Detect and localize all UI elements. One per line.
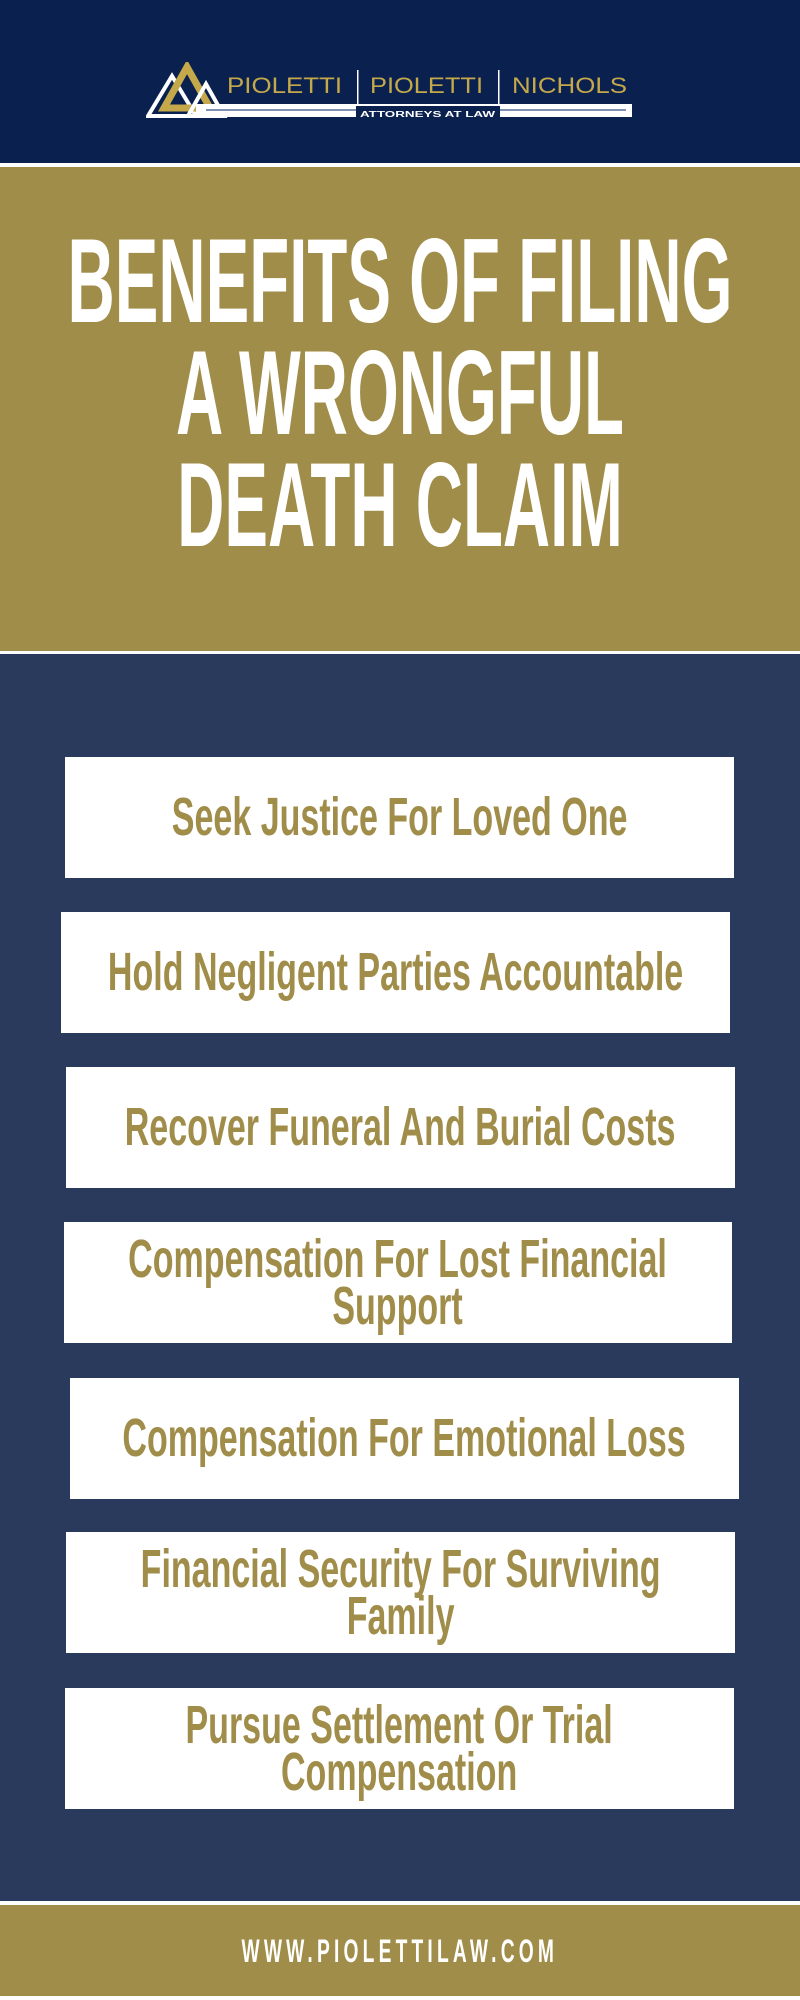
benefits panel [0,654,800,1901]
logo [146,62,632,119]
benefit 1: Seek Justice For Loved One [172,787,627,847]
benefit 6: Financial Security For Surviving [141,1538,660,1598]
benefit 3: Recover Funeral And Burial Costs [125,1097,676,1157]
benefit 7: Pursue Settlement Or Trial [186,1694,613,1754]
title: A WRONGFUL [176,326,624,460]
website url: WWW.PIOLETTILAW.COM [242,1933,558,1969]
header band [0,0,800,163]
logo: PIOLETTI [227,73,342,98]
benefit 5 [70,1378,739,1499]
benefit 6: Family [347,1586,454,1646]
benefit 2: Hold Negligent Parties Accountable [108,942,683,1002]
benefit 2 [61,912,730,1033]
benefit 4 [64,1222,732,1343]
title: DEATH CLAIM [177,438,623,572]
benefit 5: Compensation For Emotional Loss [123,1408,686,1468]
benefit 6 [66,1532,735,1653]
benefit 7 [65,1688,734,1809]
benefit 4: Support [333,1276,463,1336]
benefit 3 [66,1067,735,1188]
logo: PIOLETTI [370,73,483,98]
benefit 1 [65,757,734,878]
benefit 4: Compensation For Lost Financial [129,1228,667,1288]
title [68,214,732,572]
footer band [0,1905,800,1996]
logo: ATTORNEYS AT LAW [360,110,496,119]
benefit 7: Compensation [281,1742,518,1802]
title: BENEFITS OF FILING [68,214,732,348]
title panel [0,167,800,651]
logo: NICHOLS [512,73,627,98]
